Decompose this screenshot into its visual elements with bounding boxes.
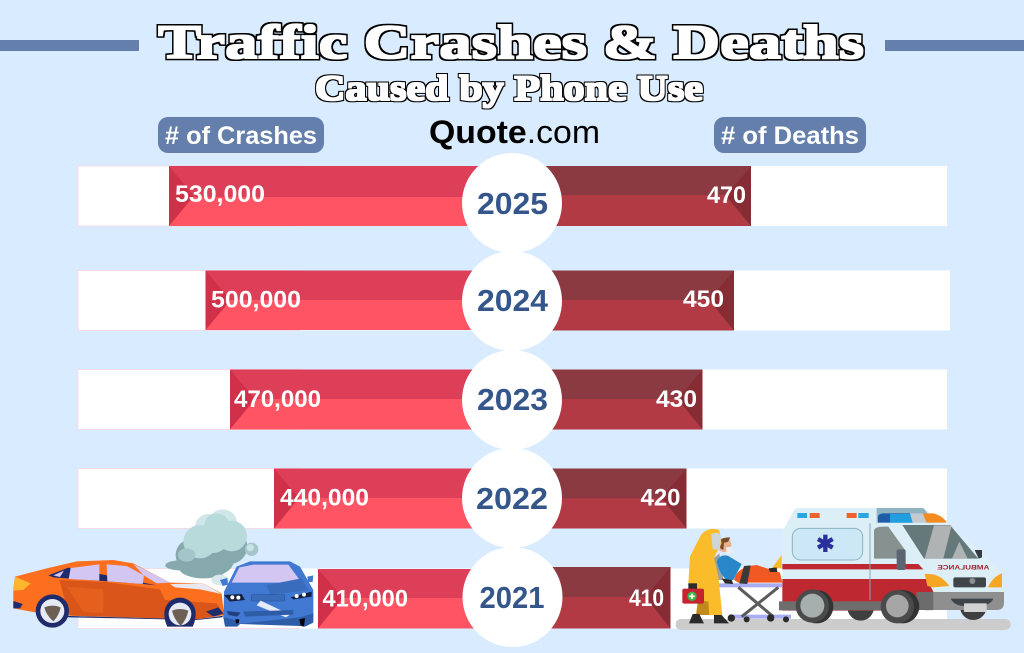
row: 2024: 500,000	[211, 286, 301, 314]
bumper	[779, 592, 1004, 612]
roof lights	[797, 513, 947, 523]
year badge: 2021: 2021	[480, 580, 544, 615]
year badge: 2023	[462, 350, 562, 450]
stretcher	[717, 583, 791, 622]
subtitle: Caused by Phone Use	[315, 68, 703, 108]
illustration: car crash	[13, 509, 313, 628]
row: 2021	[78, 567, 947, 628]
wheels	[796, 589, 919, 623]
title bar: right	[885, 40, 1024, 51]
blue car	[220, 561, 313, 627]
title bar: left	[0, 40, 139, 51]
illustration: ambulance and medic	[676, 508, 1011, 630]
row: 2021: 410,000	[322, 586, 408, 612]
row: 2021: 410	[629, 585, 664, 612]
title: Traffic Crashes & Deaths	[158, 16, 864, 69]
year badge: 2023: 2023	[477, 382, 548, 417]
year badge: 2024	[462, 251, 562, 351]
patient	[713, 537, 782, 584]
star of life	[818, 535, 833, 552]
year badge: 2024: 2024	[477, 283, 549, 318]
row: 2025	[78, 166, 947, 226]
orange car	[13, 560, 224, 620]
medical bag	[682, 589, 704, 604]
row: 2022: 440,000	[280, 484, 369, 512]
row: 2024	[78, 270, 950, 330]
rear wheels far side	[847, 593, 987, 621]
smoke cloud	[165, 509, 258, 585]
ambulance body: AMBULANCE	[937, 565, 989, 571]
road	[676, 619, 1011, 630]
legend pill: deaths	[714, 117, 866, 153]
logo: Quote.com: Quote.com	[429, 114, 600, 150]
year badge: 2025: 2025	[477, 186, 548, 221]
row: 2023: 470,000	[234, 386, 321, 413]
year badge: 2022	[462, 448, 562, 548]
year badge: 2025	[462, 153, 562, 253]
year badge: 2022: 2022	[476, 481, 548, 516]
year badge: 2021	[462, 547, 562, 647]
row: 2022	[78, 468, 947, 528]
ambulance body	[782, 508, 1003, 611]
medic in yellow suit	[688, 529, 729, 623]
row: 2023	[78, 370, 947, 430]
orange car wheels	[36, 594, 196, 628]
row: 2024: 450	[683, 286, 724, 313]
row: 2023: 430	[656, 386, 697, 413]
row: 2025: 530,000	[175, 181, 265, 208]
row: 2025: 470	[707, 182, 746, 209]
legend pill: crashes: # of Crashes	[165, 122, 317, 150]
front lights and grille	[925, 573, 1002, 587]
legend pill: deaths: # of Deaths	[721, 122, 859, 150]
row: 2022: 420	[640, 484, 680, 512]
